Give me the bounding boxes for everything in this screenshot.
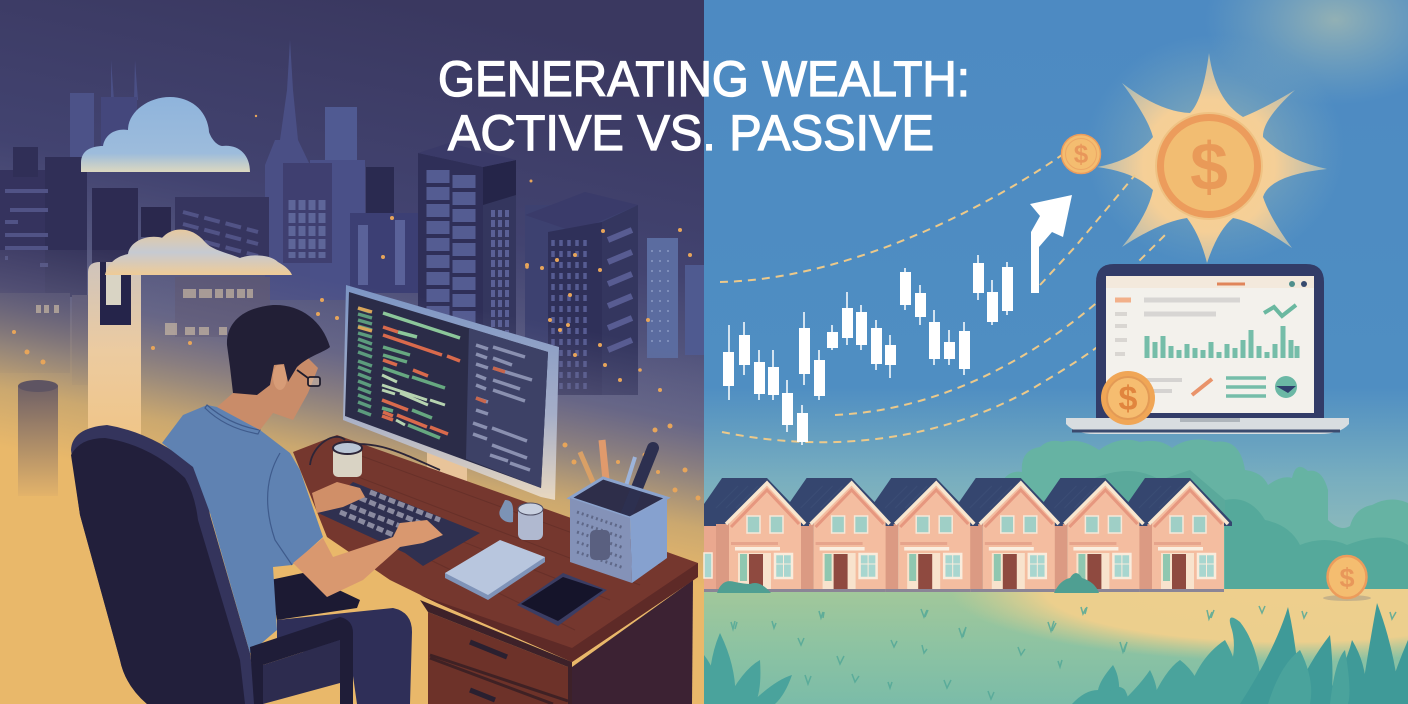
under-arm shadow [270, 573, 360, 620]
title: GENERATING WEALTH: [438, 51, 970, 107]
foreground grass [704, 603, 1408, 704]
legs [277, 608, 412, 704]
upper cloud [81, 97, 250, 172]
hair [227, 305, 330, 395]
horizon fade [0, 250, 704, 704]
trees behind houses [1003, 440, 1408, 589]
panel: active income background [0, 0, 704, 704]
small grass tufts [731, 606, 1396, 699]
armrest [250, 617, 353, 704]
laptop with dashboard [1066, 264, 1349, 434]
neck and face [217, 350, 318, 430]
keyboard [318, 482, 480, 566]
cylinder tank [18, 380, 58, 496]
distant skyline [70, 40, 365, 300]
glasses [297, 370, 320, 386]
icon: dollar sun: $ [1190, 129, 1228, 205]
smartphone [517, 573, 607, 626]
meadow [704, 589, 1408, 704]
icon: coin top: $ [1074, 139, 1089, 169]
icon: coin on meadow [1323, 556, 1371, 601]
office chair [71, 425, 257, 704]
title: ACTIVE VS. PASSIVE [448, 105, 934, 161]
icon: dollar sun [1097, 53, 1327, 263]
icon: coin top [1062, 134, 1100, 174]
icon: coin on laptop: $ [1119, 380, 1138, 418]
lower cloud [105, 229, 292, 275]
tablet [445, 540, 545, 600]
income flow dashed lines [720, 155, 1167, 442]
candlestick chart [723, 255, 1013, 445]
faint window lights [36, 289, 253, 335]
monitor with code [343, 285, 559, 513]
mid-ground city blocks [0, 147, 418, 385]
desk [293, 435, 698, 704]
far hand [312, 482, 365, 513]
mouse and mug [499, 500, 543, 540]
golden light particles [12, 115, 700, 501]
foreground towers [418, 143, 704, 395]
coffee cup and cable [310, 437, 440, 477]
pale tower with window [88, 262, 141, 440]
near arm [293, 520, 443, 597]
person coding [162, 305, 443, 704]
panel: passive income background [704, 0, 1408, 704]
pen holder [570, 440, 667, 583]
icon: coin on laptop [1101, 371, 1155, 425]
title [438, 51, 970, 161]
icon: coin on meadow: $ [1339, 563, 1355, 593]
row of houses [704, 478, 1232, 593]
shirt [162, 405, 323, 653]
arrow: rising trend [1030, 195, 1072, 293]
